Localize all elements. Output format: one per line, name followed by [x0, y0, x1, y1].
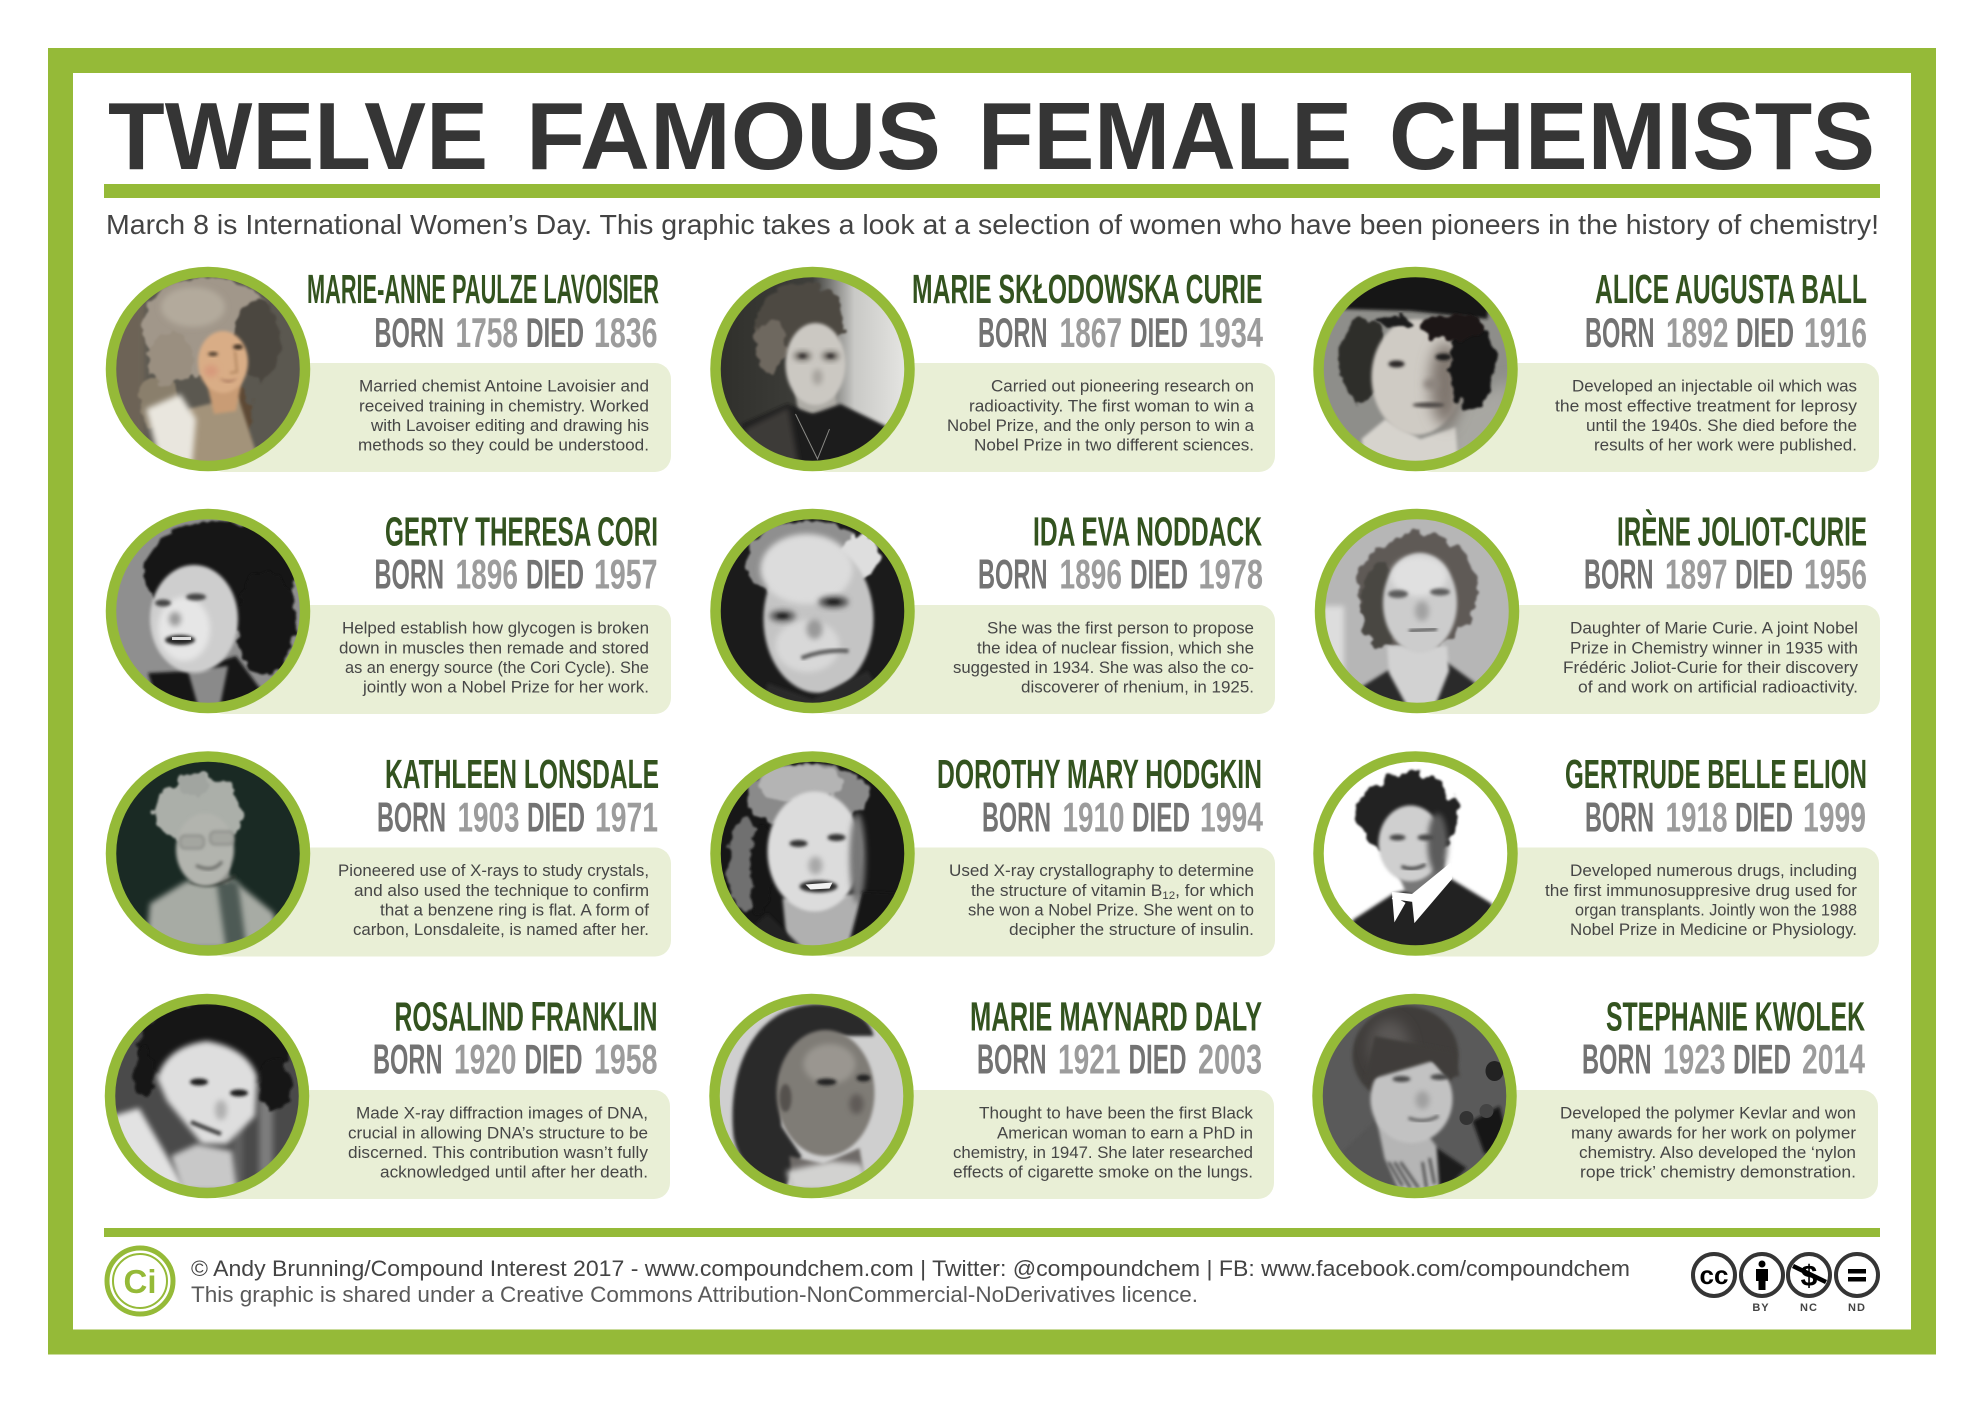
subtitle: March 8 is International Women’s Day. This graphic takes a look at a selection of women who have been pioneers in the history of chemistry! [106, 209, 1879, 240]
description [1563, 620, 1859, 697]
green portrait ring [1318, 756, 1512, 950]
card: Irène Joliot-Curie [1320, 508, 1880, 714]
description: Nobel Prize in two different sciences. [974, 437, 1254, 455]
portrait: Noddack [716, 514, 910, 708]
description panel [208, 363, 671, 472]
icon: Creative Commons BY-NC-ND badges: cc [1700, 1260, 1728, 1290]
dates: DIED [1132, 794, 1190, 840]
dates [377, 794, 658, 840]
description panel [1416, 363, 1879, 472]
name: MARIE SKŁODOWSKA CURIE [912, 266, 1262, 312]
dates: DIED [527, 794, 585, 840]
description: effects of cigarette smoke on the lungs. [953, 1164, 1253, 1182]
description: decipher the structure of insulin. [1009, 921, 1254, 939]
dates: 1897 [1665, 550, 1728, 598]
description panel [812, 848, 1275, 956]
dates: 1918 [1666, 794, 1728, 840]
dates: 1957 [594, 550, 658, 598]
description panel [208, 848, 671, 956]
dates [978, 309, 1263, 356]
description: received training in chemistry. Worked [359, 397, 649, 415]
description: , for which [1175, 882, 1254, 900]
description: American woman to earn a PhD in [997, 1124, 1253, 1142]
dates: DIED [1128, 1036, 1186, 1082]
description [1555, 378, 1858, 455]
description: Developed an injectable oil which was [1572, 378, 1857, 396]
green portrait ring [110, 999, 304, 1193]
dates: DIED [1736, 309, 1794, 356]
card: Ida Eva Noddack [716, 508, 1275, 714]
icon: Creative Commons BY-NC-ND badges: $ [1801, 1260, 1818, 1293]
description: methods so they could be understood. [358, 437, 649, 455]
description: discerned. This contribution wasn’t fully [348, 1144, 649, 1162]
description panel [1417, 605, 1880, 714]
description: jointly won a Nobel Prize for her work. [362, 679, 649, 697]
description [953, 1104, 1254, 1182]
description: 12 [1162, 890, 1175, 902]
description: Developed numerous drugs, including [1570, 862, 1857, 880]
description: suggested in 1934. She was also the co- [953, 659, 1254, 677]
description: Prize in Chemistry winner in 1935 with [1570, 639, 1858, 657]
green portrait ring [1318, 999, 1512, 1193]
description: the structure of vitamin B [971, 882, 1154, 900]
title [108, 83, 1875, 190]
name: MARIE-ANNE PAULZE LAVOISIER [307, 266, 659, 312]
dates: 1920 [454, 1036, 516, 1082]
title: FEMALE [978, 83, 1352, 190]
card: Alice Augusta Ball [1318, 266, 1879, 472]
dates: BORN [377, 794, 446, 840]
dates: 1934 [1198, 309, 1263, 356]
description: results of her work were published. [1594, 437, 1857, 455]
icon: Creative Commons BY-NC-ND badges: NC [1800, 1302, 1818, 1314]
description: Daughter of Marie Curie. A joint Nobel [1570, 620, 1858, 638]
green portrait ring [716, 272, 910, 466]
description: the most effective treatment for leprosy [1555, 397, 1858, 415]
description: She was the first person to propose [987, 620, 1254, 638]
description: chemistry, in 1947. She later researched [953, 1144, 1253, 1162]
description: Frédéric Joliot-Curie for their discovery [1563, 659, 1859, 677]
dates: 1910 [1062, 794, 1124, 840]
description: radioactivity. The first woman to win a [969, 397, 1255, 415]
description [947, 378, 1255, 455]
description: as an energy source (the Cori Cycle). She [345, 659, 649, 677]
description: with Lavoiser editing and drawing his [370, 417, 649, 435]
dates: BORN [982, 794, 1051, 840]
description: the idea of nuclear fission, which she [977, 639, 1254, 657]
description [953, 620, 1254, 697]
footer credit text: © Andy Brunning/Compound Interest 2017 - www.compoundchem.com | Twitter: @compoundchem | FB: www.facebook.com/compoundchem [191, 1256, 1630, 1281]
dates: DIED [526, 309, 584, 356]
dates: 1892 [1666, 309, 1728, 356]
icon: Compound Interest logo: Ci [124, 1263, 156, 1300]
portrait: Joliot-Curie [1320, 514, 1514, 708]
green portrait ring [716, 756, 910, 950]
description: she won a Nobel Prize. She went on to [968, 902, 1254, 920]
dates: 1958 [594, 1036, 658, 1082]
footer credit text: This graphic is shared under a Creative Commons Attribution-NonCommercial-NoDerivatives licence. [191, 1282, 1198, 1307]
description: Used X-ray crystallography to determine [949, 862, 1254, 880]
dates: BORN [373, 1036, 442, 1082]
dates: BORN [1584, 550, 1654, 598]
description: Thought to have been the first Black [979, 1104, 1254, 1122]
dates [1585, 309, 1867, 356]
portrait: Cori [111, 514, 305, 708]
dates: DIED [1733, 1036, 1791, 1082]
dates: BORN [978, 309, 1048, 356]
icon: Compound Interest logo [107, 1248, 173, 1314]
dates: DIED [1130, 309, 1188, 356]
icon: Creative Commons BY-NC-ND badges: BY [1752, 1302, 1770, 1314]
name: MARIE MAYNARD DALY [970, 994, 1262, 1040]
dates: 1896 [456, 550, 518, 598]
dates: BORN [1582, 1036, 1652, 1082]
description [358, 378, 649, 455]
description: down in muscles then remade and stored [339, 639, 649, 657]
green portrait ring [716, 514, 910, 708]
card: Dorothy Mary Hodgkin [716, 751, 1275, 956]
portrait: Lonsdale [111, 756, 305, 950]
icon: Creative Commons BY-NC-ND badges [1693, 1254, 1878, 1314]
name: GERTY THERESA CORI [385, 508, 658, 554]
dates: 1999 [1803, 794, 1866, 840]
description: Nobel Prize, and the only person to win a [947, 417, 1255, 435]
description: crucial in allowing DNA’s structure to be [348, 1124, 648, 1142]
dates [977, 1036, 1262, 1082]
dates [978, 550, 1263, 598]
dates: 1896 [1060, 550, 1122, 598]
description: and also used the technique to confirm [354, 882, 649, 900]
portrait: Elion [1318, 756, 1512, 950]
title underline bar [104, 184, 1880, 198]
dates [1585, 794, 1866, 840]
icon: Creative Commons BY-NC-ND badges: ND [1848, 1302, 1866, 1314]
dates: 1971 [595, 794, 658, 840]
description: of and work on artificial radioactivity. [1578, 679, 1858, 697]
dates: 1867 [1060, 309, 1122, 356]
title: TWELVE [108, 83, 488, 190]
dates: 1903 [458, 794, 520, 840]
dates [1582, 1036, 1865, 1082]
description: discoverer of rhenium, in 1925. [1021, 679, 1254, 697]
description panel [208, 605, 671, 714]
title: FAMOUS [526, 83, 941, 190]
description: that a benzene ring is flat. A form of [380, 902, 649, 920]
description: rope trick’ chemistry demonstration. [1580, 1164, 1856, 1182]
green portrait ring [111, 272, 305, 466]
portrait: Lavoisier [111, 272, 305, 466]
description: carbon, Lonsdaleite, is named after her. [353, 921, 649, 939]
dates [1584, 550, 1867, 598]
dates: BORN [374, 309, 444, 356]
footer credit text [191, 1256, 1630, 1307]
card: Marie Maynard Daly [714, 994, 1274, 1199]
description: Helped establish how glycogen is broken [342, 620, 649, 638]
dates: 2003 [1198, 1036, 1262, 1082]
portrait: Ball [1318, 272, 1512, 466]
dates: 1758 [456, 309, 518, 356]
description: Nobel Prize in Medicine or Physiology. [1570, 921, 1857, 939]
dates: 1978 [1198, 550, 1263, 598]
name: ROSALIND FRANKLIN [394, 994, 658, 1040]
dates: DIED [1130, 550, 1188, 598]
dates: DIED [526, 550, 584, 598]
description [348, 1104, 649, 1182]
portrait: Kwolek [1318, 999, 1512, 1193]
description: the first immunosuppresive drug used for [1545, 882, 1858, 900]
name: DOROTHY MARY HODGKIN [937, 751, 1262, 797]
description: Pioneered use of X-rays to study crystals, [338, 862, 649, 880]
description: acknowledged until after her death. [380, 1164, 648, 1182]
description: Developed the polymer Kevlar and won [1560, 1104, 1856, 1122]
dates: DIED [1735, 794, 1793, 840]
description: Married chemist Antoine Lavoisier and [359, 378, 649, 396]
dates: 2014 [1802, 1036, 1865, 1082]
green portrait ring [1318, 272, 1512, 466]
name: KATHLEEN LONSDALE [385, 751, 659, 797]
portrait: Hodgkin [716, 756, 910, 950]
description panel [811, 1090, 1274, 1199]
description panel [1416, 848, 1879, 956]
description: chemistry. Also developed the ‘nylon [1579, 1144, 1856, 1162]
card: Rosalind Franklin [110, 994, 670, 1199]
dates: 1916 [1804, 309, 1867, 356]
card: Marie-Anne Paulze Lavoisier [111, 266, 671, 472]
card: Marie Skłodowska Curie [716, 266, 1275, 472]
description [949, 862, 1254, 939]
dates: 1836 [594, 309, 658, 356]
description: Carried out pioneering research on [991, 378, 1254, 396]
dates: 1956 [1804, 550, 1867, 598]
card: Stephanie Kwolek [1318, 994, 1878, 1199]
description [1560, 1104, 1857, 1182]
description [339, 620, 649, 697]
card: Gertrude Belle Elion [1318, 751, 1879, 956]
dates: 1921 [1058, 1036, 1120, 1082]
dates [373, 1036, 658, 1082]
card: Kathleen Lonsdale [111, 751, 671, 956]
dates: BORN [977, 1036, 1046, 1082]
green portrait ring [1320, 514, 1514, 708]
title: CHEMISTS [1389, 83, 1875, 190]
green portrait ring [111, 756, 305, 950]
portrait: Curie [716, 272, 910, 466]
name: IDA EVA NODDACK [1033, 508, 1262, 554]
dates: BORN [978, 550, 1048, 598]
description [1545, 862, 1858, 939]
description: Made X-ray diffraction images of DNA, [356, 1104, 648, 1122]
dates [982, 794, 1263, 840]
green portrait ring [111, 514, 305, 708]
description panel [1415, 1090, 1878, 1199]
description panel [207, 1090, 670, 1199]
description panel [812, 605, 1275, 714]
dates: BORN [374, 550, 444, 598]
portrait: Franklin [110, 999, 304, 1193]
dates [374, 550, 658, 598]
green portrait ring [714, 999, 908, 1193]
dates: BORN [1585, 794, 1654, 840]
dates: 1994 [1200, 794, 1263, 840]
dates: DIED [1735, 550, 1793, 598]
dates [374, 309, 658, 356]
description: until the 1940s. She died before the [1586, 417, 1857, 435]
dates: BORN [1585, 309, 1654, 356]
description: organ transplants. Jointly won the 1988 [1575, 902, 1857, 920]
description panel [812, 363, 1275, 472]
card: Gerty Theresa Cori [111, 508, 671, 714]
dates: DIED [524, 1036, 582, 1082]
description [338, 862, 649, 939]
footer divider bar [104, 1228, 1880, 1237]
dates: 1923 [1663, 1036, 1726, 1082]
portrait: Daly [714, 999, 908, 1193]
description: many awards for her work on polymer [1571, 1124, 1857, 1142]
